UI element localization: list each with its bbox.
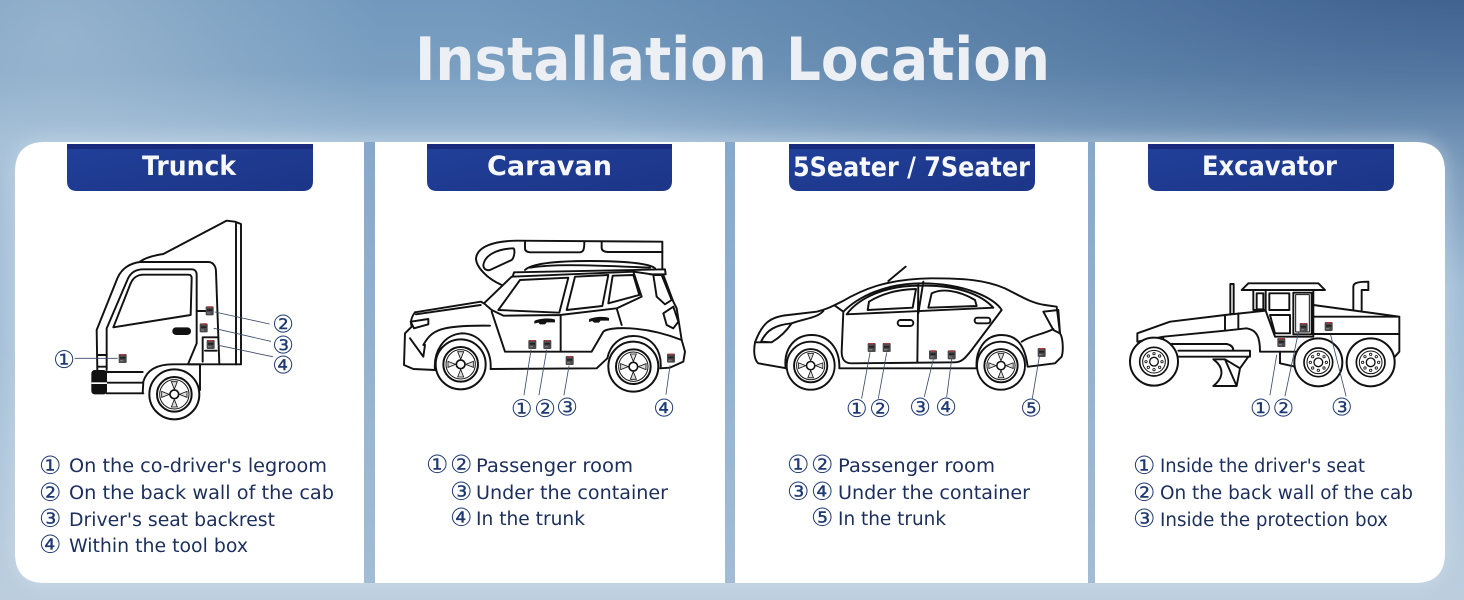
illustration: sedan: ⑤ [1020, 393, 1042, 422]
list: 5Seater / 7Seater locations: ⑤ [811, 503, 833, 532]
list: 5Seater / 7Seater locations: ① [787, 450, 809, 479]
list: Excavator locations: Inside the protection box [1160, 510, 1388, 531]
illustration: excavator: ② [1272, 394, 1294, 423]
list: Trunck locations: On the back wall of the cab [69, 483, 334, 504]
illustration: truck [53, 221, 294, 419]
panel: Caravan [375, 142, 725, 583]
list: Caravan locations: ② [450, 450, 472, 479]
list: Excavator locations: ① [1133, 451, 1155, 480]
list: 5Seater / 7Seater locations: In the trunk [838, 509, 946, 530]
list: 5Seater / 7Seater locations: ④ [811, 477, 833, 506]
list: Trunck locations: Driver's seat backrest [69, 510, 275, 531]
list: Trunck locations: ① [39, 451, 61, 480]
illustration: excavator [1130, 282, 1399, 423]
list: 5Seater / 7Seater locations: Passenger room [838, 456, 995, 477]
panel: 5Seater / 7Seater [735, 142, 1088, 583]
heading: 5Seater / 7Seater [789, 144, 1035, 191]
list: Caravan locations: Passenger room [476, 456, 633, 477]
panel glow [9, 136, 1451, 589]
illustration: excavator: ③ [1331, 393, 1353, 422]
list: Caravan locations: ① [426, 450, 448, 479]
list: Caravan locations: In the trunk [476, 509, 585, 530]
illustration: sedan: ② [869, 394, 891, 423]
illustration: sedan: ③ [909, 392, 931, 421]
list: Caravan locations: Under the container [476, 483, 668, 504]
panel: Trunck [15, 142, 364, 583]
list: 5Seater / 7Seater locations: Under the container [838, 483, 1030, 504]
illustration: sedan: ④ [935, 392, 957, 421]
illustration: truck: ② [272, 310, 294, 339]
illustration: sedan: ① [846, 394, 868, 423]
list: Excavator locations: Inside the driver's seat [1160, 456, 1365, 477]
list: Excavator locations [1133, 451, 1413, 533]
list: Trunck locations: ④ [39, 530, 61, 559]
heading: Excavator [1148, 144, 1394, 191]
panel: Excavator [1095, 142, 1445, 583]
illustration: truck: ① [53, 345, 75, 374]
list: 5Seater / 7Seater locations [787, 450, 1030, 532]
list: Caravan locations: ④ [450, 503, 472, 532]
illustration: excavator: ① [1250, 394, 1272, 423]
list: Caravan locations [426, 450, 668, 532]
list: Trunck locations [39, 451, 334, 559]
list: Excavator locations: ③ [1133, 504, 1155, 533]
list: 5Seater / 7Seater locations: ③ [787, 477, 809, 506]
list: Trunck locations: On the co-driver's legroom [69, 456, 327, 477]
illustration: sedan [754, 267, 1063, 423]
heading: 5Seater / 7Seater: 5Seater / 7Seater [793, 152, 1031, 183]
list: Trunck locations: ③ [39, 504, 61, 533]
illustration: truck: ③ [272, 330, 294, 359]
heading: Trunck [67, 144, 313, 191]
illustration: caravan: ③ [556, 393, 578, 422]
illustration: caravan: ② [534, 394, 556, 423]
list: Caravan locations: ③ [450, 477, 472, 506]
list: Trunck locations: ② [39, 478, 61, 507]
heading: Trunck: Trunck [142, 151, 237, 182]
list: Excavator locations: On the back wall of the cab [1160, 483, 1413, 504]
illustration: truck: ④ [272, 351, 294, 380]
illustration: caravan [404, 241, 685, 423]
list: Excavator locations: ② [1133, 478, 1155, 507]
illustration: caravan: ① [511, 394, 533, 423]
list: Trunck locations: Within the tool box [69, 536, 248, 557]
title: Installation Location [415, 25, 1050, 95]
heading: Caravan: Caravan [487, 151, 612, 182]
heading: Caravan [427, 144, 672, 191]
list: 5Seater / 7Seater locations: ② [811, 450, 833, 479]
illustration: caravan: ④ [653, 393, 675, 422]
heading: Excavator: Excavator [1202, 151, 1338, 182]
